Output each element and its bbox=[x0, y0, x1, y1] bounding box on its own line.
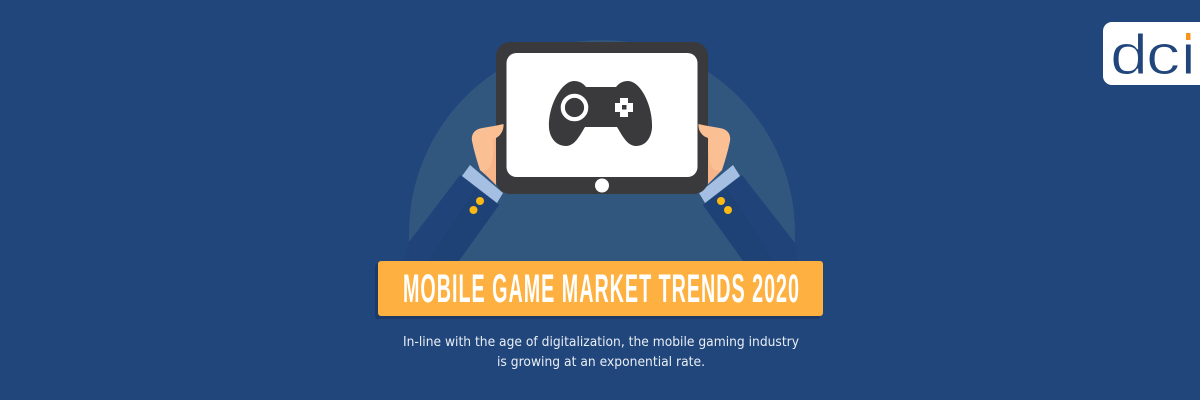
right cuff bbox=[699, 165, 740, 203]
title banner shadow bbox=[375, 264, 820, 319]
tablet home button bbox=[595, 178, 609, 192]
left cuff buttons bbox=[470, 197, 484, 214]
tablet screen bbox=[506, 53, 698, 177]
background semicircle bbox=[409, 40, 795, 262]
right hand bbox=[698, 124, 730, 184]
tablet body bbox=[496, 42, 708, 194]
title banner bbox=[378, 261, 823, 316]
left arm bbox=[404, 165, 503, 262]
subtitle: In-line with the age of digitalization, the mobile gaming industry bbox=[403, 335, 799, 350]
subtitle bbox=[403, 335, 799, 370]
left hand bbox=[472, 124, 504, 185]
right arm bbox=[699, 165, 798, 262]
subtitle: is growing at an exponential rate. bbox=[497, 355, 705, 370]
title: MOBILE GAME MARKET TRENDS 2020 bbox=[403, 267, 799, 311]
logo: dci bbox=[1110, 23, 1196, 87]
right cuff buttons bbox=[717, 197, 732, 214]
left cuff bbox=[462, 165, 503, 203]
icon: game controller bbox=[549, 81, 652, 146]
